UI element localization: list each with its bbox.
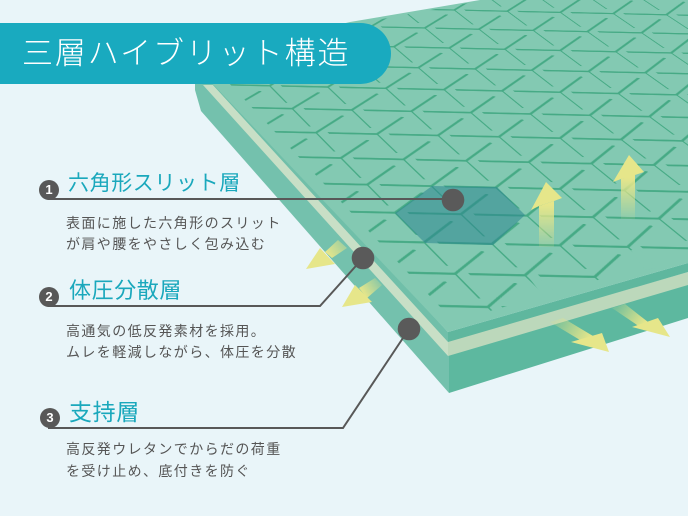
leader line 3 — [48, 318, 420, 428]
title banner — [0, 23, 391, 84]
description: layer 2 — [66, 323, 297, 360]
slit pattern on top surface — [230, 0, 688, 311]
hexagon highlight — [395, 186, 525, 245]
arrow: left 1 — [306, 240, 347, 269]
arrow: up 1 — [531, 182, 562, 247]
number badge 1: 1 — [45, 182, 53, 197]
heading: layer 3: 支持層 — [69, 399, 140, 425]
leader line 1 — [48, 189, 464, 211]
arrow: up 2 — [613, 155, 644, 219]
number badge 3: 3 — [46, 410, 54, 425]
description: layer 2: ムレを軽減しながら、体圧を分散 — [66, 344, 297, 360]
description: layer 1 — [66, 215, 282, 252]
description: layer 3: 高反発ウレタンでからだの荷重 — [66, 441, 282, 457]
description: layer 3 — [66, 441, 282, 479]
title text: 三層ハイブリット構造 — [22, 36, 350, 71]
arrow: left 2 — [342, 278, 382, 307]
support layer side faces — [195, 60, 688, 393]
number badge 1 — [39, 180, 59, 200]
cream diffusion layer — [203, 85, 688, 356]
arrow: right 2 — [612, 304, 670, 337]
description: layer 1: 表面に施した六角形のスリット — [66, 215, 282, 231]
arrow: right 1 — [550, 318, 609, 352]
description: layer 1: が肩や腰をやさしく包み込む — [66, 236, 266, 252]
top surface — [190, 0, 688, 332]
number badge 3 — [40, 408, 60, 428]
leader line 2 — [48, 247, 374, 306]
description: layer 2: 高通気の低反発素材を採用。 — [66, 323, 266, 339]
number badge 2: 2 — [45, 289, 53, 304]
description: layer 3: を受け止め、底付きを防ぐ — [66, 463, 251, 479]
heading: layer 1: 六角形スリット層 — [68, 172, 241, 195]
top layer side strips — [213, 85, 688, 342]
heading: layer 2: 体圧分散層 — [69, 278, 182, 303]
number badge 2 — [39, 287, 59, 307]
